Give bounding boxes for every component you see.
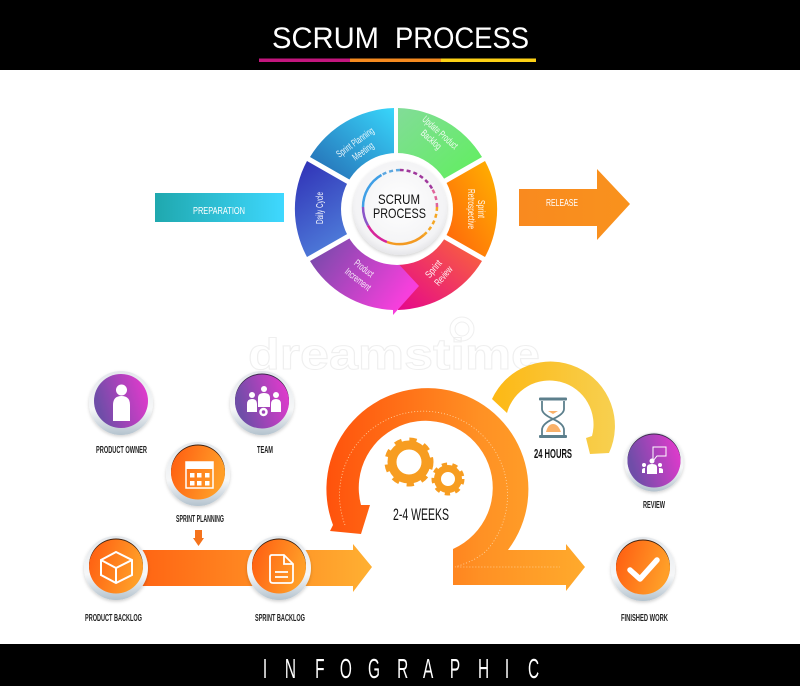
segment: sprint review: Review: [433, 264, 456, 288]
icon: product backlog: [84, 536, 148, 600]
label: product backlog: PRODUCT BACKLOG: [85, 612, 142, 624]
footer text: INFOGRAPHIC: [263, 653, 539, 684]
segment: update product backlog: [398, 108, 482, 181]
title: [272, 22, 529, 55]
segment: update product backlog: Backlog: [418, 128, 443, 152]
icon: product owner: [89, 371, 153, 435]
chart: scrum wheel: [295, 108, 497, 315]
header band: [0, 0, 800, 70]
segment: update product backlog: Update Product: [420, 114, 460, 152]
label: review: REVIEW: [643, 499, 665, 511]
center disc: SCRUM: [378, 191, 420, 207]
segment: daily cycle: [295, 161, 349, 257]
arrow: backlog bar: [116, 544, 372, 592]
segment: sprint planning meeting: [310, 108, 394, 181]
segment: sprint planning meeting: Meeting: [351, 140, 376, 163]
center disc: [341, 153, 453, 265]
label: product owner: PRODUCT OWNER: [96, 444, 147, 456]
watermark: dreamstime: [248, 330, 540, 379]
text: SPRINT PLANNING: [176, 513, 224, 525]
segment: sprint planning meeting: Sprint Planning: [334, 126, 377, 160]
segment: product increment: [310, 237, 419, 315]
segment: sprint review: Sprint: [423, 258, 445, 281]
icon: review: [624, 432, 684, 492]
label: sprint backlog: SPRINT BACKLOG: [255, 612, 305, 624]
segment: product increment: Increment: [342, 266, 373, 294]
panel: preparation: [155, 193, 284, 222]
segment: sprint retrospective: [443, 161, 497, 257]
segment: product increment: Product: [351, 258, 376, 280]
icon: finished work: [611, 537, 675, 601]
icon: down arrow: [193, 530, 204, 546]
arrow: yellow daily loop: [492, 362, 615, 454]
center disc: PROCESS: [373, 205, 426, 221]
segment: sprint retrospective: Sprint: [475, 200, 486, 218]
segment: sprint review: [398, 237, 482, 310]
label: team: TEAM: [257, 444, 273, 456]
title: SCRUM: [272, 22, 379, 55]
segment: daily cycle: Daily Cycle: [314, 192, 326, 224]
label: 2-4 weeks: 2-4 WEEKS: [393, 505, 449, 524]
segment: sprint retrospective: Retrospective: [465, 189, 476, 229]
arrow: omega sprint loop: [326, 388, 585, 591]
arrow: release: RELEASE: [546, 198, 578, 209]
label: 24 hours: 24 HOURS: [534, 447, 572, 461]
icon: hourglass: [539, 398, 567, 438]
icon: gears: [388, 440, 462, 493]
arrow: release: [519, 169, 630, 240]
watermark: [248, 317, 540, 379]
icon: team: [230, 371, 294, 435]
icon: sprint backlog: [247, 536, 311, 600]
icon: sprint planning: [166, 442, 230, 506]
label: finished work: FINISHED WORK: [621, 612, 668, 624]
footer band: [0, 644, 800, 686]
title: PROCESS: [395, 22, 529, 55]
panel: preparation: PREPARATION: [193, 206, 245, 217]
title underline: [259, 58, 536, 62]
